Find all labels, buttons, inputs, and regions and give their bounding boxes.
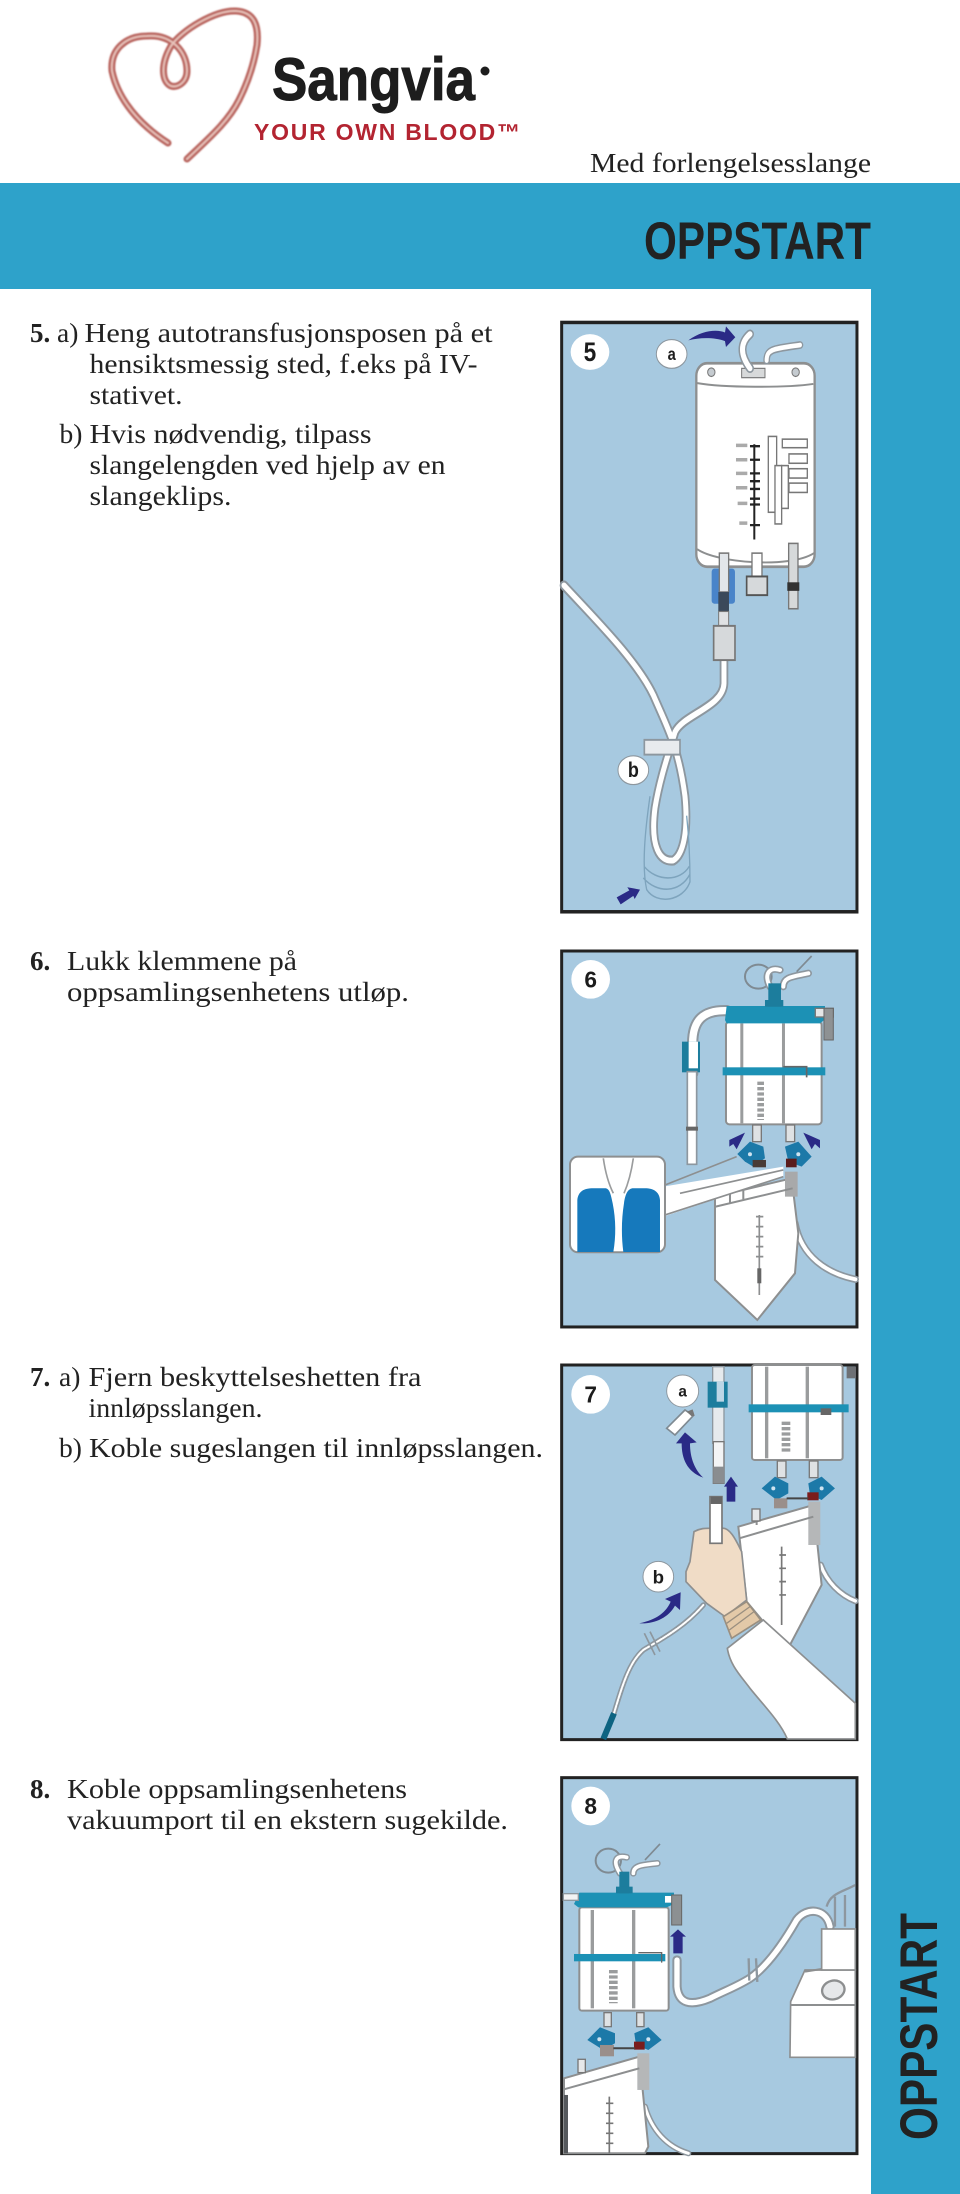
badge a: a	[678, 1383, 687, 1400]
step 8 text: 8.	[30, 1774, 50, 1804]
gloved hand	[686, 1497, 761, 1638]
step 5 text: a)	[57, 317, 78, 348]
icon: heart tube	[112, 11, 257, 159]
long tube and loop	[564, 585, 724, 899]
panel: step 8 illustration	[562, 1778, 857, 2154]
step 5 text: b)	[60, 418, 82, 449]
panel: step 6 illustration	[562, 951, 857, 1327]
step 7 text: 7.	[30, 1362, 50, 1392]
step 7 text	[30, 1361, 543, 1463]
step 7 text: Fjern beskyttelseshetten fra	[88, 1361, 422, 1392]
outlets	[712, 569, 735, 604]
badge b: b	[628, 759, 639, 783]
bag	[696, 363, 815, 567]
arrow: connect up	[670, 1929, 686, 1953]
step badge 6	[571, 960, 610, 999]
outlets and clamps	[762, 1461, 835, 1508]
panel: step 5 illustration	[562, 322, 857, 912]
step badge 5	[571, 334, 609, 370]
hooks	[742, 334, 750, 368]
step 7 text: a)	[59, 1361, 80, 1392]
top hoops	[745, 956, 812, 989]
step 5 text: slangelengden ved hjelp av en	[90, 449, 446, 480]
canister	[726, 1022, 822, 1124]
left tube	[682, 1011, 727, 1164]
step 6 text: oppsamlingsenhetens utløp.	[67, 976, 409, 1007]
step badge 5: 5	[584, 338, 597, 367]
panel: step 7 illustration	[562, 1365, 857, 1740]
badge b	[643, 1561, 674, 1592]
collection bag	[715, 1178, 798, 1320]
step 5 text: stativet.	[90, 379, 182, 410]
lid	[725, 1006, 825, 1023]
step 8 text	[30, 1773, 508, 1835]
collection bag	[564, 2057, 648, 2153]
bag labels	[768, 436, 807, 524]
badge a	[667, 1375, 699, 1407]
bag tube	[795, 1223, 855, 1279]
step badge 7: 7	[584, 1381, 597, 1407]
step 7 text: b)	[59, 1432, 82, 1463]
suction unit	[790, 1885, 855, 2057]
step 8 text: Koble oppsamlingsenhetens	[67, 1773, 407, 1804]
step 7 text: Koble sugeslangen til innløpsslangen.	[89, 1432, 543, 1463]
canister	[579, 1907, 669, 2011]
arrow: connect up	[724, 1477, 738, 1502]
logo: Sangvia Your Own Blood	[112, 11, 520, 159]
step 5 text: 5.	[30, 318, 50, 348]
brand name: Sangvia	[272, 46, 476, 113]
step 6 text: 6.	[30, 946, 50, 976]
subtitle: Med forlengelsesslange	[590, 147, 871, 178]
clip	[644, 740, 680, 755]
canister	[752, 1365, 843, 1460]
step 5 text: Heng autotransfusjonsposen på et	[84, 317, 493, 348]
step badge 6: 6	[584, 966, 597, 992]
arrow: attach suction tube	[639, 1592, 681, 1623]
step 5 text: slangeklips.	[90, 480, 232, 511]
step 6 text	[30, 945, 409, 1007]
canister band	[574, 1954, 665, 1961]
badge b	[618, 756, 649, 785]
bag tube	[821, 1565, 855, 1601]
protective cap	[667, 1409, 695, 1435]
suction tube	[603, 1605, 703, 1739]
step 8 text: vakuumport til en ekstern sugekilde.	[67, 1804, 508, 1835]
badge b: b	[653, 1566, 664, 1587]
arrow: tube bundle	[617, 887, 640, 904]
step badge 8	[571, 1787, 610, 1825]
step 7 text: innløpsslangen.	[88, 1392, 262, 1423]
arrow: hang bag	[688, 326, 735, 347]
step badge 8: 8	[584, 1793, 597, 1819]
vertical heading: OPPSTART	[890, 1913, 949, 2140]
arrow: remove cap	[676, 1432, 703, 1478]
badge a: a	[668, 346, 676, 364]
vacuum tube	[677, 1911, 830, 2003]
top hoops	[596, 1844, 660, 1873]
heading: OPPSTART	[644, 212, 871, 271]
step 5 text: hensiktsmessig sted, f.eks på IV-	[90, 348, 478, 379]
step 5 text	[30, 317, 493, 511]
lid	[574, 1893, 674, 1907]
collection bag	[738, 1505, 822, 1645]
bag tube	[645, 2107, 688, 2153]
outlets and clamps	[729, 1125, 820, 1167]
outlets and clamps	[587, 2013, 662, 2056]
header band	[0, 183, 960, 289]
canister band	[723, 1067, 825, 1075]
coat sleeve	[727, 1620, 855, 1739]
inlet tube	[708, 1367, 728, 1483]
right side strip	[871, 183, 960, 2194]
step badge 7	[571, 1375, 610, 1414]
step 5 text: Hvis nødvendig, tilpass	[90, 418, 372, 449]
tagline: YOUR OWN BLOOD™	[254, 119, 520, 145]
step 6 text: Lukk klemmene på	[67, 945, 297, 976]
scale	[750, 444, 760, 540]
registered mark	[480, 66, 490, 76]
badge a	[656, 340, 687, 368]
callout: zoom of closed clamps	[570, 1157, 783, 1252]
